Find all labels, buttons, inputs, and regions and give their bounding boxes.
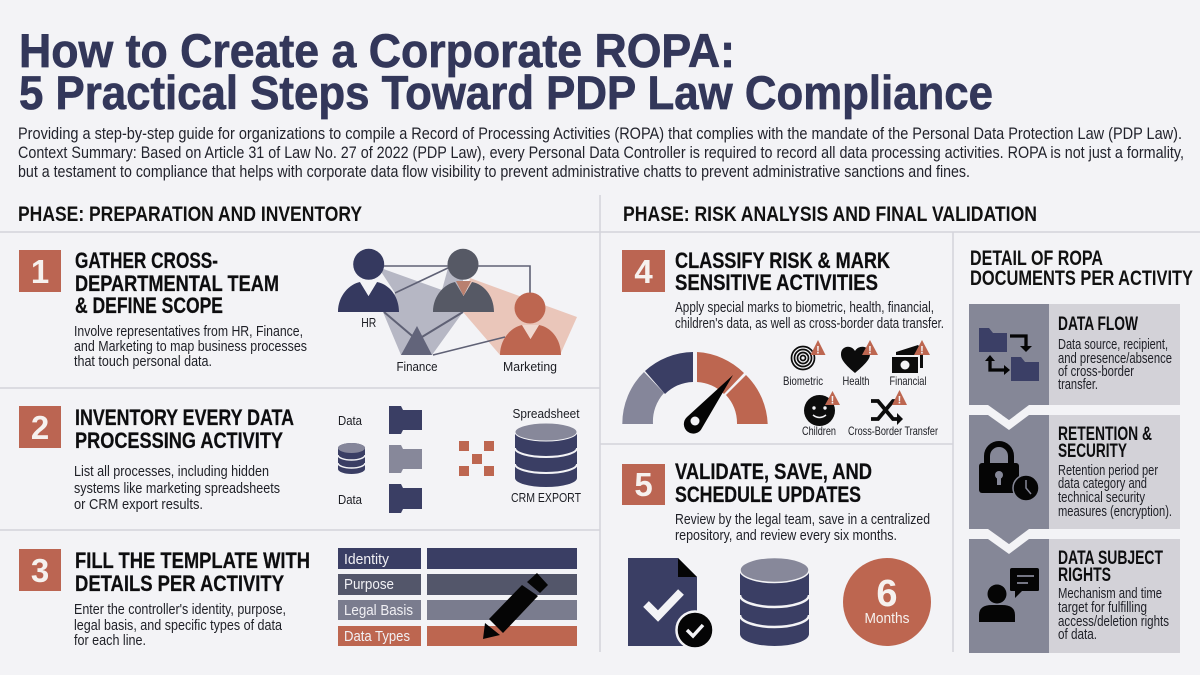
data inventory diagram [338, 406, 581, 513]
step 2 body text: List all processes, including hidden [74, 464, 269, 480]
step 3 heading [75, 548, 310, 596]
icon: cross-border transfer: Cross-Border Transfer [848, 424, 938, 438]
step 3 body text [74, 602, 286, 649]
panel: step 3 [19, 548, 577, 649]
step 2 body text: systems like marketing spreadsheets [74, 481, 280, 497]
detail panel heading [970, 247, 1193, 290]
card: data subject rights: access/deletion rights [1058, 614, 1169, 630]
title [19, 25, 993, 120]
card: retention and security: data category and [1058, 476, 1147, 492]
step 2 heading: PROCESSING ACTIVITY [75, 428, 283, 453]
icon: biometric: Biometric [783, 374, 823, 388]
card: retention and security: RETENTION & [1058, 423, 1152, 445]
chevron arrow: retention to rights [969, 529, 1049, 554]
heading: phase risk analysis and final validation: PHASE: RISK ANALYSIS AND FINAL VALIDATION [623, 203, 1037, 226]
step 5 heading: VALIDATE, SAVE, AND [675, 459, 872, 484]
intro text [18, 124, 1184, 181]
heading: phase preparation and inventory: PHASE: PREPARATION AND INVENTORY [18, 203, 362, 226]
icon: health: ! [868, 344, 872, 356]
step 3 number badge [19, 549, 61, 591]
step 3 body text: Enter the controller's identity, purpose, [74, 602, 286, 618]
step 1 body text: and Marketing to map business processes [74, 339, 307, 355]
team network diagram: Finance [396, 359, 438, 374]
step 5 number badge: 5 [634, 466, 653, 503]
icon: health [841, 340, 878, 388]
step 5 body text: Review by the legal team, save in a centralized [675, 512, 930, 528]
template table with pencil: Legal Basis [344, 602, 413, 619]
card: data subject rights [969, 539, 1180, 653]
card: data flow: transfer. [1058, 377, 1098, 393]
card: data flow [969, 304, 1180, 405]
step 1 heading [75, 248, 279, 318]
step 3 number badge: 3 [31, 552, 49, 589]
step 3 body text: for each line. [74, 633, 146, 649]
six months badge [843, 558, 931, 646]
step 5 body text: repository, and review every six months. [675, 528, 897, 544]
card: data subject rights: of data. [1058, 627, 1097, 643]
intro text: but a testament to compliance that helps with corporate data flow visibility to prevent administrative chatts to prevent administrative sanctions and fines. [18, 162, 970, 181]
icon: health: Health [842, 374, 870, 388]
icon: person with speech bubble [979, 568, 1039, 622]
step 5 body text [675, 512, 930, 544]
chevron arrow: data flow to retention [969, 405, 1049, 430]
step 4 number badge: 4 [634, 253, 653, 290]
icon: biometric [783, 340, 826, 388]
panel: step 5 [622, 459, 931, 648]
team network diagram: Marketing [503, 359, 557, 374]
step 3 heading: DETAILS PER ACTIVITY [75, 571, 284, 596]
title: How to Create a Corporate ROPA: [19, 25, 735, 78]
detail panel heading: DETAIL OF ROPA [970, 247, 1103, 270]
card: data flow: of cross-border [1058, 364, 1134, 380]
card: data subject rights: Mechanism and time [1058, 586, 1162, 602]
panel: step 1 [19, 248, 577, 374]
panel: detail of ROPA documents [969, 247, 1193, 653]
icon: cross-border transfer: ! [898, 394, 901, 406]
step 2 number badge [19, 406, 61, 448]
card: data subject rights: RIGHTS [1058, 564, 1111, 586]
card: retention and security [969, 415, 1180, 529]
data inventory diagram: Spreadsheet [512, 406, 580, 421]
card: retention and security: SECURITY [1058, 440, 1127, 462]
step 1 body text: Involve representatives from HR, Finance, [74, 324, 303, 340]
panel: step 4 [622, 248, 944, 438]
step 1 number badge: 1 [31, 253, 49, 290]
step 3 heading: FILL THE TEMPLATE WITH [75, 548, 310, 573]
card: data flow: Data source, recipient, [1058, 337, 1168, 353]
card: retention and security: Retention period per [1058, 463, 1158, 479]
step 2 heading [75, 405, 294, 453]
step 4 heading: CLASSIFY RISK & MARK [675, 248, 890, 273]
step 3 body text: legal basis, and specific types of data [74, 618, 283, 634]
step 5 heading [675, 459, 872, 507]
template table with pencil: Purpose [344, 576, 394, 593]
step 4 body text [675, 300, 944, 332]
icon: financial: ! [920, 344, 924, 356]
step 5 number badge [622, 464, 665, 505]
icon: children [802, 391, 840, 438]
icon: lock with clock [979, 444, 1039, 501]
six months badge: 6 [876, 573, 898, 615]
data inventory diagram: Data [338, 413, 363, 428]
icon: children: Children [802, 424, 836, 438]
card: data subject rights: target for fulfilling [1058, 600, 1147, 616]
step 4 body text: children's data, as well as cross-border data transfer. [675, 316, 944, 332]
panel: step 2 [19, 405, 581, 513]
icon: cross-border transfer [848, 390, 938, 438]
step 1 heading: & DEFINE SCOPE [75, 293, 223, 318]
team network diagram: HR [361, 315, 376, 330]
step 2 heading: INVENTORY EVERY DATA [75, 405, 294, 430]
step 2 body text: or CRM export results. [74, 497, 203, 513]
step 4 number badge [622, 250, 665, 292]
data inventory diagram: Data [338, 492, 363, 507]
icon: children: ! [831, 394, 834, 406]
title: 5 Practical Steps Toward PDP Law Compliance [19, 67, 993, 120]
data inventory diagram: CRM EXPORT [511, 490, 581, 505]
template table with pencil [338, 548, 577, 646]
icon: financial [890, 340, 930, 388]
six months badge: Months [864, 611, 910, 627]
step 1 heading: DEPARTMENTAL TEAM [75, 271, 279, 296]
step 1 body text: that touch personal data. [74, 354, 212, 370]
template table with pencil: Data Types [344, 628, 410, 645]
icon: central repository [740, 558, 809, 646]
icon: biometric: ! [816, 344, 820, 356]
step 2 number badge: 2 [31, 409, 49, 446]
step 4 heading [675, 248, 890, 295]
team network diagram [338, 249, 577, 374]
template table with pencil: Identity [344, 551, 389, 568]
step 1 heading: GATHER CROSS- [75, 248, 218, 273]
step 4 heading: SENSITIVE ACTIVITIES [675, 270, 878, 295]
icon: financial: Financial [890, 374, 926, 388]
step 1 number badge [19, 250, 61, 292]
card: data flow: DATA FLOW [1058, 313, 1138, 335]
card: retention and security: technical security [1058, 490, 1146, 506]
risk gauge [622, 352, 768, 434]
step 4 body text: Apply special marks to biometric, health, financial, [675, 300, 934, 316]
step 2 body text [74, 464, 280, 513]
icon: data flow folders [979, 328, 1039, 381]
step 5 heading: SCHEDULE UPDATES [675, 482, 861, 507]
step 1 body text [74, 324, 307, 370]
icon: validated document [628, 558, 714, 648]
